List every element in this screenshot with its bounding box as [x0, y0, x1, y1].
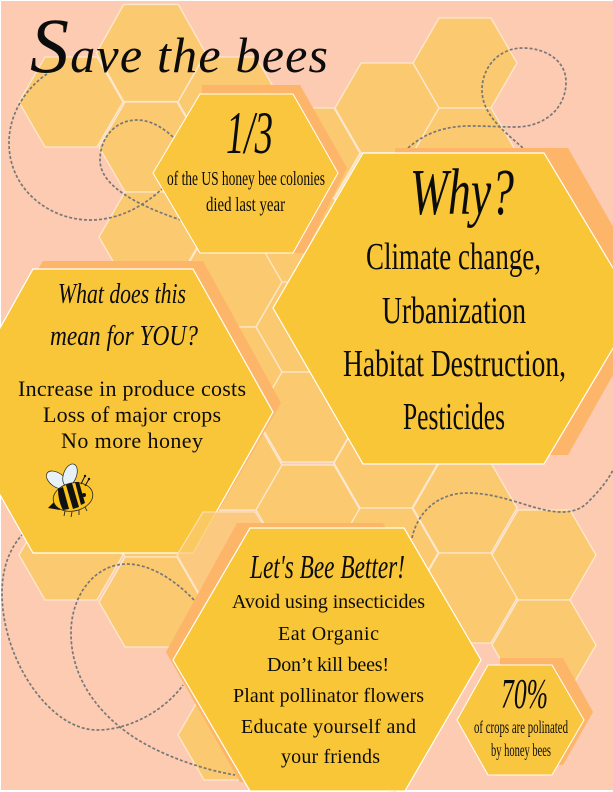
heading: what does this mean for you: mean for YOU? [50, 321, 198, 352]
panel: 1/3 statistic [153, 85, 347, 253]
text: actions list: Eat Organic [278, 623, 379, 645]
text: causes [343, 236, 566, 438]
heading: Why?: Why? [410, 156, 514, 229]
text: actions list: Educate yourself and [241, 716, 416, 738]
statistic: 1/3: 1/3 [226, 100, 273, 166]
title: Save the bees [30, 2, 328, 89]
text: actions list: Avoid using insecticides [232, 591, 425, 613]
text: actions list: Don’t kill bees! [267, 654, 389, 676]
text: actions list: your friends [281, 746, 380, 768]
text: causes: Climate change, [366, 236, 541, 278]
text: US colonies died: of the US honey bee colonies [167, 168, 325, 190]
text: causes: Pesticides [403, 396, 505, 438]
translucent overlay hexagon [177, 512, 282, 600]
heading: what does this mean for you: What does this [58, 279, 186, 310]
panel: why [273, 148, 613, 464]
heading: what does this mean for you [50, 279, 198, 352]
text: US colonies died: died last year [206, 194, 285, 216]
heading: Let's Bee Better!: Let's Bee Better! [249, 549, 405, 586]
text: actions list [232, 591, 425, 768]
panel: let's bee better [166, 523, 481, 792]
text: consequences: Increase in produce costs [18, 376, 246, 401]
text: actions list: Plant pollinator flowers [233, 685, 424, 707]
text: consequences: No more honey [61, 428, 203, 453]
statistic: 70%: 70% [501, 672, 548, 718]
panel: what does this mean [0, 261, 281, 553]
text: crops pollinated [474, 717, 568, 760]
text: crops pollinated: by honey bees [491, 740, 551, 760]
panel: 70% statistic [457, 658, 593, 775]
text: consequences: Loss of major crops [43, 402, 221, 427]
text: causes: Urbanization [382, 290, 526, 332]
text: consequences [18, 376, 246, 453]
text: US colonies died [167, 168, 325, 216]
icon: bee [43, 462, 95, 517]
